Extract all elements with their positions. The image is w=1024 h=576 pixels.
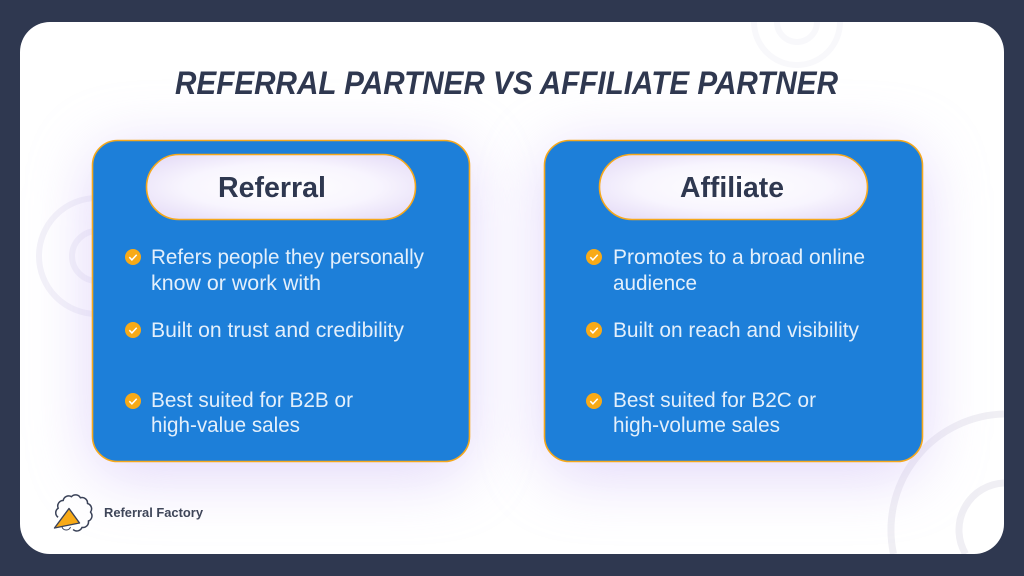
list item: b2c: Best suited for B2C or	[613, 389, 816, 412]
list item: refers people: know or work with	[151, 272, 321, 295]
list item: b2c: high-volume sales	[613, 414, 780, 437]
list item: b2b: high-value sales	[151, 414, 300, 437]
heading pill: affiliate	[600, 154, 868, 220]
brand name: Referral Factory	[104, 506, 203, 520]
list item: b2c	[586, 389, 816, 437]
list item: reach: Built on reach and visibility	[613, 319, 859, 342]
list item: promotes: audience	[613, 272, 697, 295]
list item: refers people: Refers people they personally	[151, 246, 424, 269]
panel: affiliate	[544, 140, 922, 462]
list item: b2b	[125, 389, 353, 437]
logo: referral factory	[54, 495, 203, 531]
heading pill: affiliate: Affiliate	[680, 172, 784, 204]
heading pill: referral	[146, 154, 416, 220]
list item: refers people	[125, 246, 424, 295]
icon: megaphone in gear	[54, 495, 92, 531]
list item: trust: Built on trust and credibility	[151, 319, 404, 342]
list item: b2b: Best suited for B2B or	[151, 389, 353, 412]
list item: promotes	[586, 246, 865, 295]
panel: referral	[92, 140, 470, 462]
heading pill: referral: Referral	[218, 172, 326, 204]
list item: promotes: Promotes to a broad online	[613, 246, 865, 269]
title: REFERRAL PARTNER VS AFFILIATE PARTNER	[175, 65, 838, 101]
